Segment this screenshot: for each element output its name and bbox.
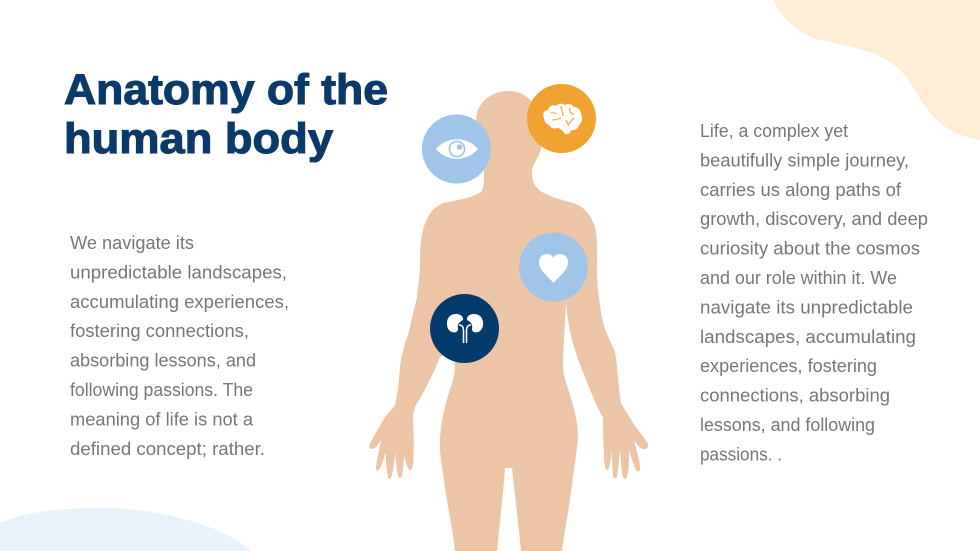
title: human body [64,115,333,163]
title [64,66,388,163]
text block: left paragraph: We navigate its [70,233,194,253]
text block: right paragraph: growth, discovery, and deep [700,209,928,229]
text block: left paragraph: absorbing lessons, and [70,351,256,371]
text block: right paragraph: lessons, and following [700,415,875,435]
human body silhouette [369,91,648,551]
text block: left paragraph: meaning of life is not a [70,409,254,429]
text block: right paragraph: beautifully simple journey, [700,150,909,170]
icon: eye [422,114,491,184]
icon: heart [519,232,588,302]
text block: right paragraph: experiences, fostering [700,356,877,376]
text block: left paragraph: fostering connections, [70,321,249,341]
text block: right paragraph: passions. . [700,444,782,464]
icon: kidneys [430,294,499,363]
text block: right paragraph: navigate its unpredictable [700,297,913,317]
text block: right paragraph: connections, absorbing [700,386,890,406]
text block: right paragraph: landscapes, accumulating [700,327,916,347]
text block: right paragraph: carries us along paths of [700,180,902,200]
text block: left paragraph: unpredictable landscapes, [70,262,287,282]
background blob: bottom left [0,508,252,551]
text block: right paragraph: curiosity about the cosmos [700,239,920,259]
text block: right paragraph: and our role within it. We [700,268,897,288]
background blob: top right [774,0,980,140]
text block: left paragraph: accumulating experiences, [70,292,289,312]
text block: right paragraph [700,121,928,464]
text block: right paragraph: Life, a complex yet [700,121,848,141]
title: Anatomy of the [64,66,388,114]
icon: brain [527,84,596,153]
text block: left paragraph: following passions. The [70,380,253,400]
text block: left paragraph [70,233,289,459]
text block: left paragraph: defined concept; rather. [70,439,265,459]
